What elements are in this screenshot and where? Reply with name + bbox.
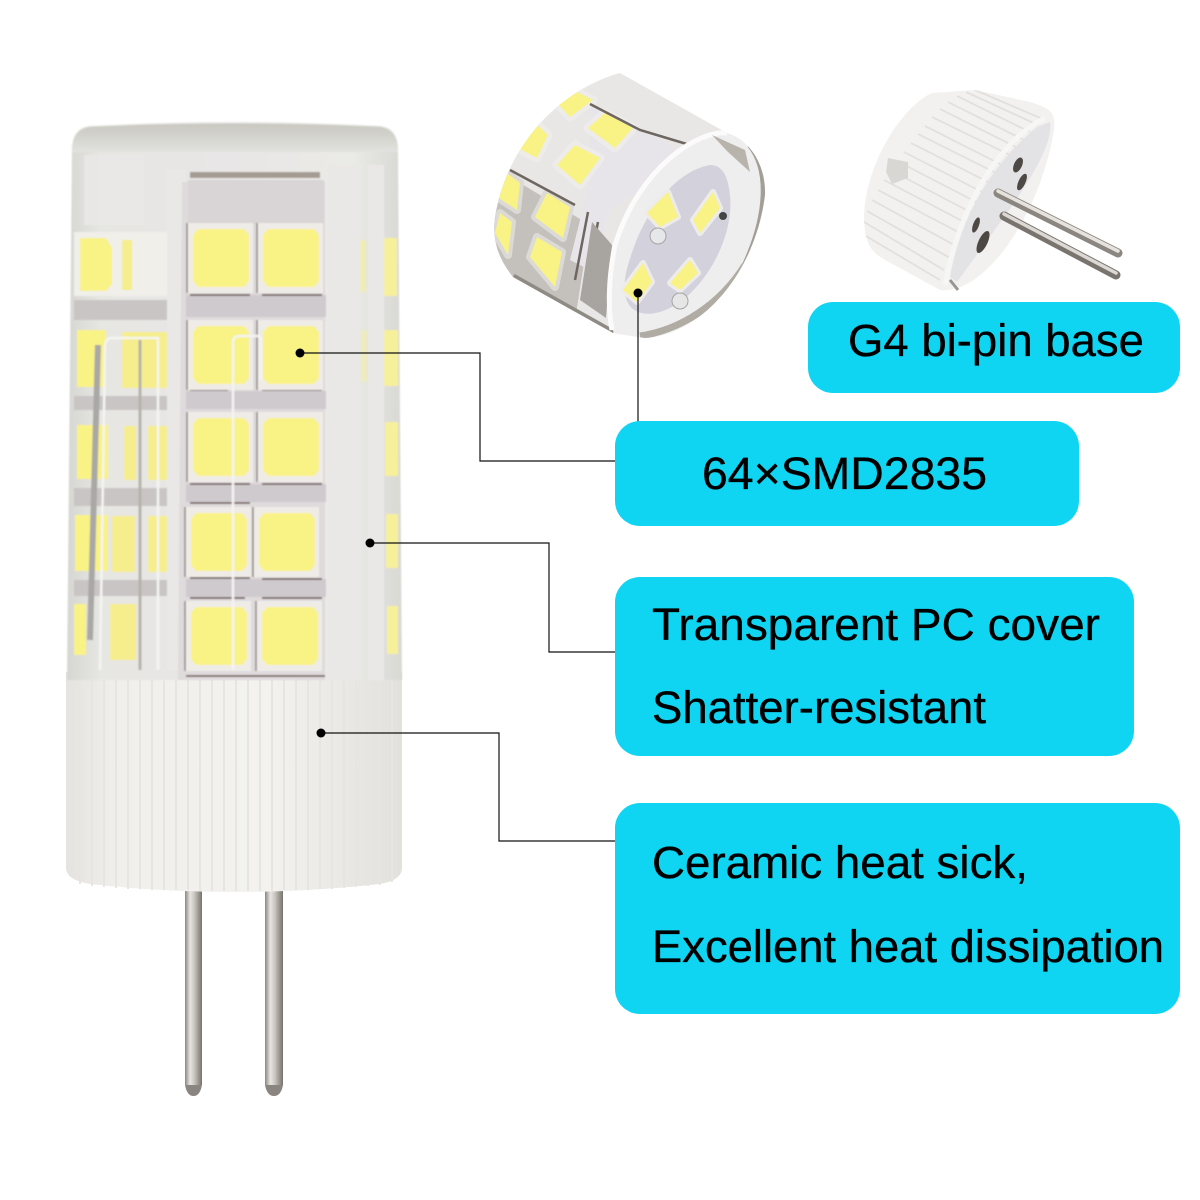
side LEDs right bbox=[360, 238, 398, 654]
leader line: SMD chip on bulb to 64×SMD2835 bbox=[296, 348, 616, 461]
base pins bbox=[998, 191, 1118, 275]
cover top rim bbox=[72, 124, 398, 152]
socket recess bbox=[886, 158, 908, 184]
leader line: end-face chip to 64×SMD2835 bbox=[634, 288, 642, 422]
front LED panel bbox=[178, 172, 326, 680]
callout: Transparent PC cover: Shatter-resistant bbox=[652, 682, 986, 733]
leader line: ceramic to heat sink label bbox=[316, 728, 616, 841]
clear vertical ribs bbox=[84, 155, 384, 680]
LED chips column 2 bbox=[253, 223, 323, 671]
callout: Transparent PC cover: Transparent PC cover bbox=[652, 599, 1100, 650]
detail photo: ceramic base with pins bbox=[864, 90, 1118, 290]
side LEDs left bbox=[74, 232, 179, 660]
callout: 64×SMD2835 bbox=[615, 421, 1079, 526]
base underside face bbox=[950, 122, 1050, 282]
callout: Ceramic heat sink: Ceramic heat sick, bbox=[652, 837, 1028, 888]
ceramic base bbox=[66, 672, 402, 892]
callout: G4 bi-pin base bbox=[808, 302, 1180, 393]
callout: G4 bi-pin base: G4 bi-pin base bbox=[848, 315, 1144, 366]
LED chips column 1 bbox=[185, 223, 253, 671]
inner wires bbox=[90, 336, 261, 670]
callout: Ceramic heat sink: Excellent heat dissipation bbox=[652, 921, 1164, 972]
contact holes bbox=[970, 156, 1029, 255]
leader line: cover to Transparent PC cover bbox=[366, 538, 616, 652]
callout: 64×SMD2835: 64×SMD2835 bbox=[702, 448, 987, 499]
clear end face bbox=[609, 133, 765, 338]
transparent cover bbox=[67, 122, 402, 680]
callout: Transparent PC cover bbox=[615, 577, 1134, 756]
detail photo: LED top view bbox=[490, 73, 765, 338]
main bulb photo bbox=[66, 122, 402, 1096]
callout: Ceramic heat sink bbox=[615, 803, 1180, 1014]
bulb pins bbox=[185, 880, 283, 1096]
cylinder side LEDs bbox=[490, 90, 690, 333]
